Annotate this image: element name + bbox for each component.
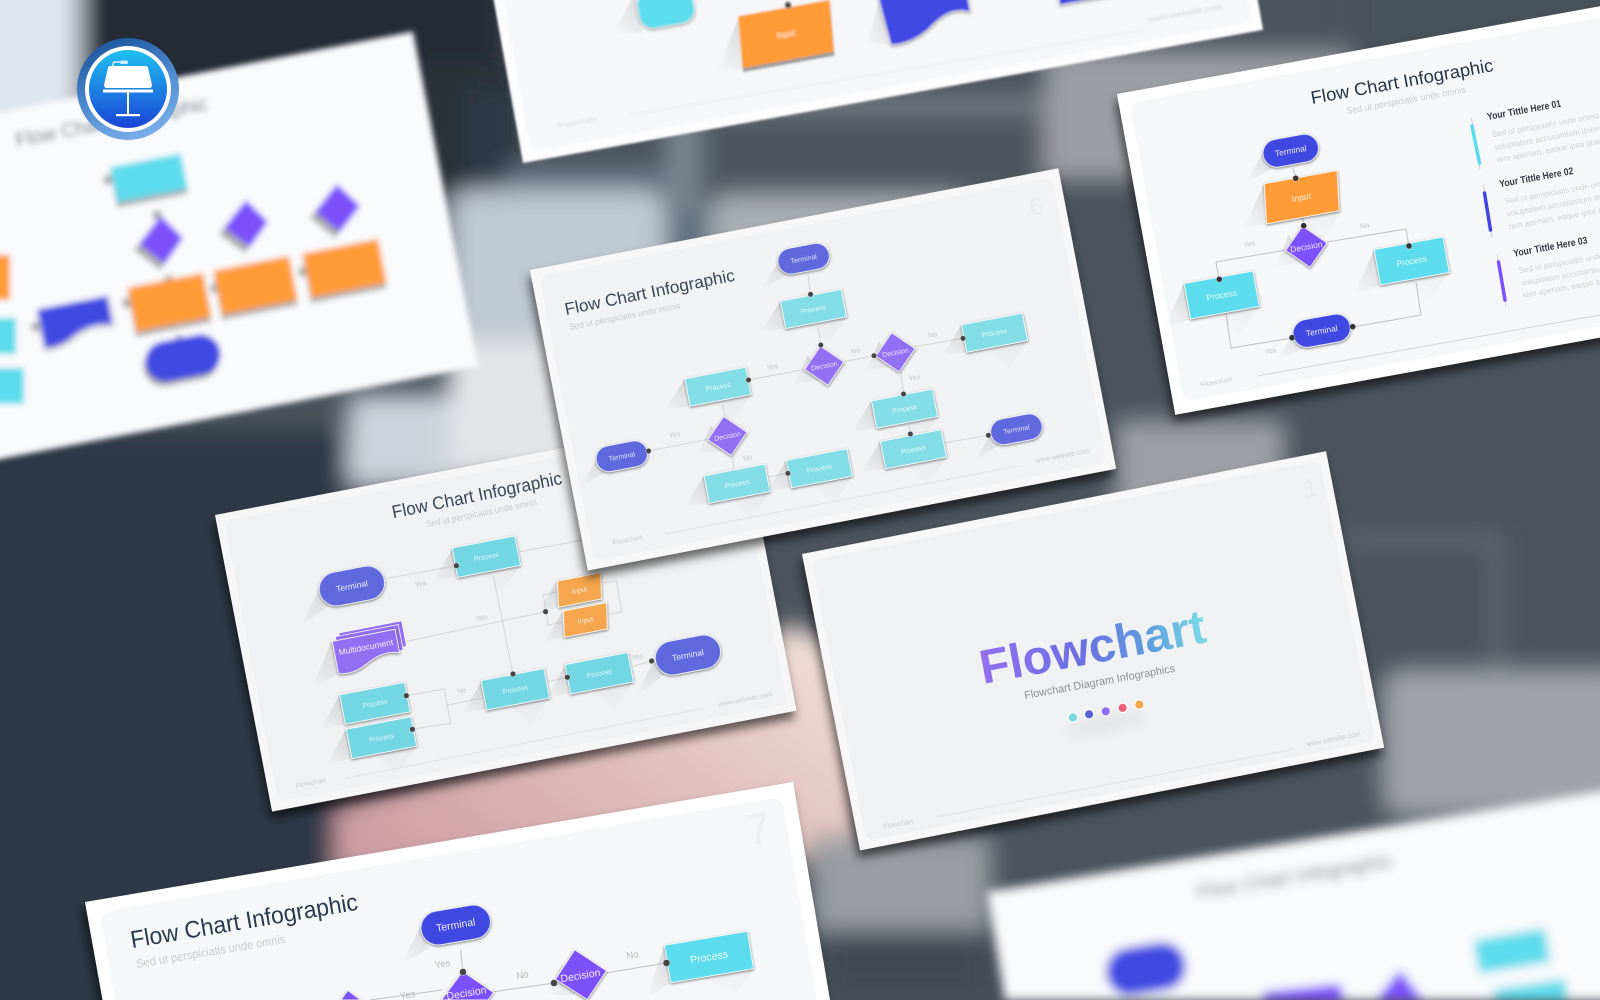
input: Input [1291, 191, 1312, 204]
process right: Process [1396, 253, 1428, 269]
soft shadow under dots [1063, 708, 1149, 740]
branch labels: No [516, 969, 529, 982]
subtitle: Sed ut perspiciatis unde omnis [1346, 84, 1467, 116]
connector dots [460, 960, 670, 986]
process middle [457, 669, 554, 737]
process bottom 2 [763, 449, 857, 516]
cyan shape [608, 0, 697, 37]
title: Flow Chart Infographic [128, 889, 360, 954]
footer: www.website.com [717, 691, 773, 709]
terminal top [756, 241, 833, 289]
process top [428, 536, 525, 605]
process bottom left 2 [322, 717, 421, 786]
footer: Flowchart [558, 116, 597, 130]
slide number: 6 [1027, 192, 1046, 222]
slide number: 7 [742, 803, 775, 856]
terminal top: Terminal [1274, 143, 1308, 158]
input box: Input [776, 27, 797, 41]
terminal right [969, 412, 1046, 460]
process left [1157, 271, 1264, 347]
process right [938, 313, 1032, 380]
process right [541, 653, 638, 721]
terminal left [292, 563, 390, 626]
terminal bottom: Terminal [1305, 323, 1339, 338]
footer: Flowchart [295, 777, 326, 790]
terminal [394, 902, 495, 965]
subtitle: Flowchart Diagram Infographics [1023, 663, 1177, 702]
process box [110, 153, 188, 203]
blurred shape shadows [31, 158, 387, 390]
branch labels: No [928, 331, 938, 340]
multidocument [303, 621, 411, 687]
branch labels: No [626, 949, 639, 962]
branch labels: Yes [414, 580, 427, 589]
decision diamonds [139, 184, 360, 264]
slide sheet [530, 168, 1116, 570]
connector dots [646, 292, 991, 476]
subtitle: Sed ut perspiciatis unde omnis [568, 300, 682, 332]
icon: keynote badge [77, 38, 179, 140]
terminal top [1239, 132, 1323, 183]
process bottom 2: Process [806, 463, 833, 475]
decision [1269, 222, 1331, 273]
terminal right: Terminal [1003, 424, 1031, 436]
process left [661, 367, 756, 434]
input [1237, 170, 1349, 254]
connector dots [1216, 175, 1412, 341]
slide sheet [987, 788, 1600, 1000]
process middle [848, 389, 942, 456]
blurred heading: Flow Chart Infographic [1195, 850, 1394, 904]
process right [1347, 237, 1454, 313]
decision: center [442, 971, 494, 1000]
panel: blurred slide top [448, 0, 1263, 163]
process bottom 1 [680, 464, 775, 531]
panel: slide 7 bottom [85, 782, 830, 1000]
decision 3 [692, 413, 751, 462]
input 2 [540, 603, 612, 642]
process top: Process [473, 552, 500, 564]
decision: left [341, 990, 361, 1000]
branch labels: Yes [631, 653, 644, 662]
terminal left: Terminal [608, 451, 636, 463]
footer: www.website.com [1305, 731, 1362, 749]
footer [883, 731, 1362, 831]
panel: title slide [802, 451, 1384, 850]
process bottom left 1 [315, 682, 410, 729]
subtitle: Sed ut perspiciatis unde omnis [135, 932, 286, 971]
process right: Process [982, 328, 1008, 340]
process middle: Process [502, 684, 529, 696]
slide sheet [802, 451, 1384, 850]
text block 03: Your Tittle Here 03 [1513, 235, 1589, 260]
text block 03 [1513, 235, 1600, 300]
process bottom 1: Process [724, 479, 751, 491]
terminal left [574, 439, 651, 487]
input 2: Input [577, 616, 594, 626]
decision 3: Decision [714, 431, 742, 443]
title: Flow Chart Infographic [1309, 55, 1495, 108]
main title: Flowchart [975, 601, 1210, 695]
slide sheet [1117, 0, 1600, 415]
branch labels: No [457, 687, 467, 696]
slide sheet [0, 32, 478, 481]
footer [558, 4, 1223, 130]
slide sheet [85, 782, 830, 1000]
decision 2: Decision [882, 347, 910, 359]
branch labels: Yes [1264, 347, 1277, 356]
decision cropped [1376, 970, 1423, 1000]
text block 01 [1486, 99, 1600, 164]
connectors [649, 275, 988, 477]
decision: right [545, 950, 607, 1000]
connectors [370, 950, 666, 1000]
branch labels: No [743, 454, 753, 463]
process left: Process [705, 382, 732, 394]
process top [757, 289, 851, 357]
branch labels: Yes [434, 958, 451, 971]
input 1 [534, 573, 606, 612]
slide number: 1 [1300, 472, 1320, 504]
panel: slide 5 left center [215, 414, 796, 812]
terminal right [628, 632, 726, 695]
panel: blurred slide top left [0, 32, 478, 481]
footer: www.website.com [1146, 4, 1223, 24]
process right: Process [586, 668, 613, 680]
process middle: Process [892, 404, 918, 416]
footer: Flowchart [1200, 376, 1233, 389]
subtitle: Sed ut perspiciatis unde omnis [425, 497, 538, 529]
multidocument: Multidocument [338, 637, 395, 657]
panel: slide 6 center [530, 168, 1116, 570]
footer: Flowchart [612, 534, 643, 547]
title: Flow Chart Infographic [563, 266, 737, 319]
process lower: Process [901, 444, 927, 456]
text block 01: Your Tittle Here 01 [1486, 99, 1562, 123]
small cropped shape [1057, 0, 1115, 5]
terminal [1103, 939, 1189, 999]
branch labels [414, 580, 644, 696]
connector dots [404, 563, 654, 732]
process left: Process [1206, 287, 1238, 303]
terminal right: Terminal [671, 647, 705, 663]
branch labels: Yes [908, 374, 921, 383]
document shape [861, 0, 974, 49]
blurred heading: Flow Chart Infographic [14, 93, 209, 152]
connectors [388, 540, 652, 729]
branch labels: No [851, 347, 861, 356]
process bottom left 1: Process [362, 698, 389, 710]
process top: Process [801, 304, 827, 316]
document cropped [1261, 984, 1345, 1000]
color dots [1068, 700, 1144, 722]
footer [1200, 315, 1600, 389]
branch labels: Yes [475, 614, 488, 623]
panel: blurred slide bottom right [987, 788, 1600, 1000]
branch labels: Yes [1243, 240, 1256, 249]
process box cropped [1492, 979, 1568, 1000]
branch labels [668, 331, 938, 463]
decision 1: Decision [811, 361, 838, 373]
cropped left shapes [0, 255, 24, 404]
terminal bottom [1272, 312, 1354, 359]
text block 02 [1499, 166, 1600, 231]
terminal left: Terminal [335, 578, 369, 594]
terminal: Terminal [435, 916, 476, 935]
decision: Decision [1289, 239, 1323, 255]
text block 02: Your Tittle Here 02 [1499, 166, 1575, 190]
branch labels [1243, 222, 1370, 356]
footer [612, 448, 1091, 547]
terminal [142, 331, 224, 385]
process [639, 931, 757, 1000]
process box [1474, 928, 1550, 974]
connector dot [784, 2, 792, 8]
footer: www.website.com [1034, 448, 1091, 465]
accent bars [1472, 118, 1506, 306]
input 1: Input [571, 586, 588, 596]
decision: right: Decision [560, 967, 602, 985]
slide sheet [215, 414, 796, 812]
slide sheet [448, 0, 1263, 163]
process lower [857, 430, 951, 497]
input boxes [128, 239, 387, 332]
title: Flow Chart Infographic [390, 468, 564, 522]
terminal top: Terminal [790, 254, 818, 266]
input box [709, 0, 840, 77]
footer [295, 691, 773, 790]
panel: right slide with text column [1117, 0, 1600, 415]
branch labels [399, 949, 639, 1000]
branch labels: Yes [766, 363, 779, 372]
decision 2 [860, 329, 919, 378]
decision 1 [789, 342, 848, 391]
process bottom left 2: Process [369, 733, 395, 745]
process: Process [689, 948, 729, 967]
footer: Flowchart [883, 818, 914, 831]
document shape [37, 295, 115, 349]
connectors [1216, 168, 1421, 348]
branch labels: No [1360, 222, 1370, 231]
branch labels: Yes [668, 431, 681, 440]
